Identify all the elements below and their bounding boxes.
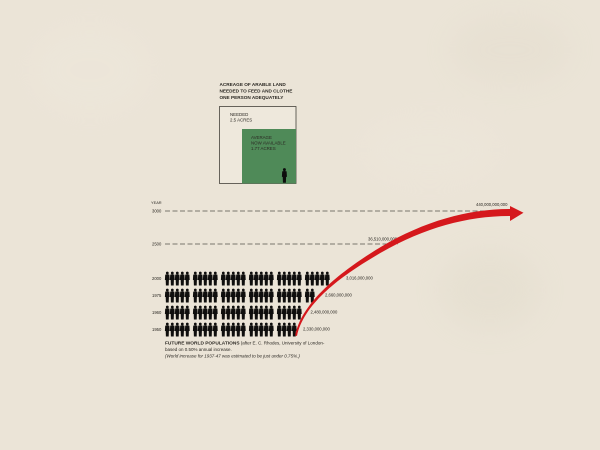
text: needed acres: 2.5 ACRES <box>230 118 252 122</box>
caption: future world populations: based on 0.50% annual increase. <box>165 347 232 352</box>
pictogram row: 2000: 2000 <box>152 276 162 281</box>
pictogram row: 1960: 2,480,000,000 <box>310 310 338 314</box>
pictogram row: 2000: 3,016,000,000 <box>346 276 373 280</box>
caption: future world populations: FUTURE WORLD POPULATIONS (after E. C. Rhodes, University of London- <box>165 340 325 346</box>
green area: average available <box>242 129 296 184</box>
pictogram row: 1975: 2,660,000,000 <box>325 292 352 298</box>
pictogram row: 1950: 1950 <box>152 327 162 332</box>
heading: arable land <box>220 82 292 100</box>
icon: person <box>282 168 287 183</box>
heading: arable land: NEEDED TO FEED AND CLOTHE <box>220 88 292 94</box>
heading: arable land: ACREAGE OF ARABLE LAND <box>220 82 286 87</box>
text: average available acres: AVERAGE <box>251 135 272 140</box>
year axis label: YEAR <box>151 200 162 205</box>
caption: future world populations: (World increase for 1937-47 was estimated to be just under 0.75%.) <box>165 354 300 358</box>
text: average available acres <box>251 135 286 151</box>
pictogram row: 1950: 2,330,000,000 <box>303 326 330 332</box>
text: needed acres <box>230 112 252 122</box>
pictogram row: 1960: 1960 <box>152 310 162 315</box>
arrow: population growth curve <box>295 206 524 336</box>
text: average available acres: 1.77 ACRES <box>251 146 276 151</box>
pictogram row: 1950 <box>152 323 330 336</box>
text: average available acres: NOW AVAILABLE <box>251 140 286 146</box>
heading: arable land: ONE PERSON ADEQUATELY <box>220 95 284 100</box>
acreage square diagram <box>220 106 296 184</box>
year row: 2500 <box>152 236 398 246</box>
pictogram row: 1975: 1975 <box>152 293 162 298</box>
pictogram row: 1975 <box>152 289 352 302</box>
pictogram row: 2000 <box>152 272 373 286</box>
year row: 3000: 440,000,000,000 <box>476 202 508 207</box>
year row: 3000: 3000 <box>152 208 162 214</box>
caption: future world populations <box>165 340 325 358</box>
year row: 2500: 2500 <box>152 242 162 246</box>
text: needed acres: NEEDED <box>230 112 248 117</box>
pictogram row: 1960 <box>152 306 338 320</box>
year row: 3000 <box>152 202 512 214</box>
year row: 2500: 36,510,000,000 <box>368 236 398 242</box>
